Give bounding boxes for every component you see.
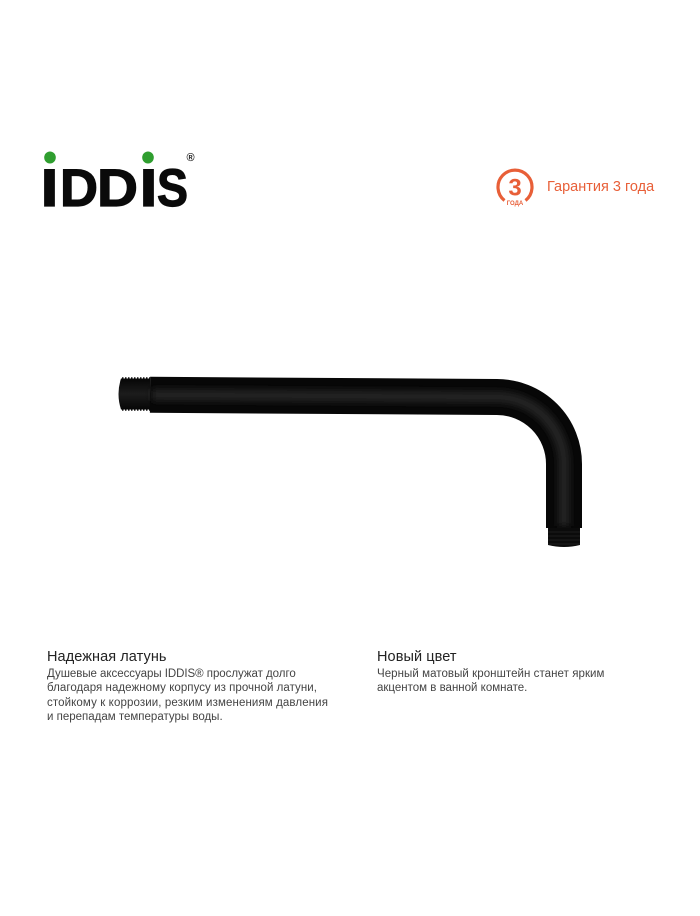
warranty text: Гарантия 3 года	[547, 179, 654, 195]
badge ring	[498, 170, 532, 200]
pipe body	[150, 395, 564, 528]
logo dots	[44, 152, 154, 164]
bottom thread	[548, 528, 580, 547]
warranty badge	[496, 168, 534, 207]
registered mark: ®	[186, 152, 195, 164]
logo: IDDIS	[40, 152, 195, 210]
body text: и перепадам температуры воды.	[47, 711, 223, 723]
body text: акцентом в ванной комнате.	[377, 682, 527, 694]
logo letters	[40, 159, 188, 218]
body text	[47, 668, 328, 723]
product: black shower arm	[118, 376, 582, 547]
body text: Черный матовый кронштейн станет ярким	[377, 668, 604, 680]
feature: brass	[47, 649, 328, 723]
body text: благодаря надежному корпусу из прочной латуни,	[47, 682, 317, 694]
body text: стойкому к коррозии, резким изменениям давления	[47, 697, 328, 709]
badge number: 3	[508, 174, 522, 202]
body text	[377, 668, 604, 694]
heading: Новый цвет	[377, 649, 457, 665]
badge caption: ГОДА	[507, 201, 524, 207]
body text: Душевые аксессуары IDDIS® прослужат долго	[47, 668, 296, 680]
heading: Надежная латунь	[47, 649, 167, 665]
feature: new colour	[377, 649, 604, 694]
left thread	[118, 378, 150, 410]
